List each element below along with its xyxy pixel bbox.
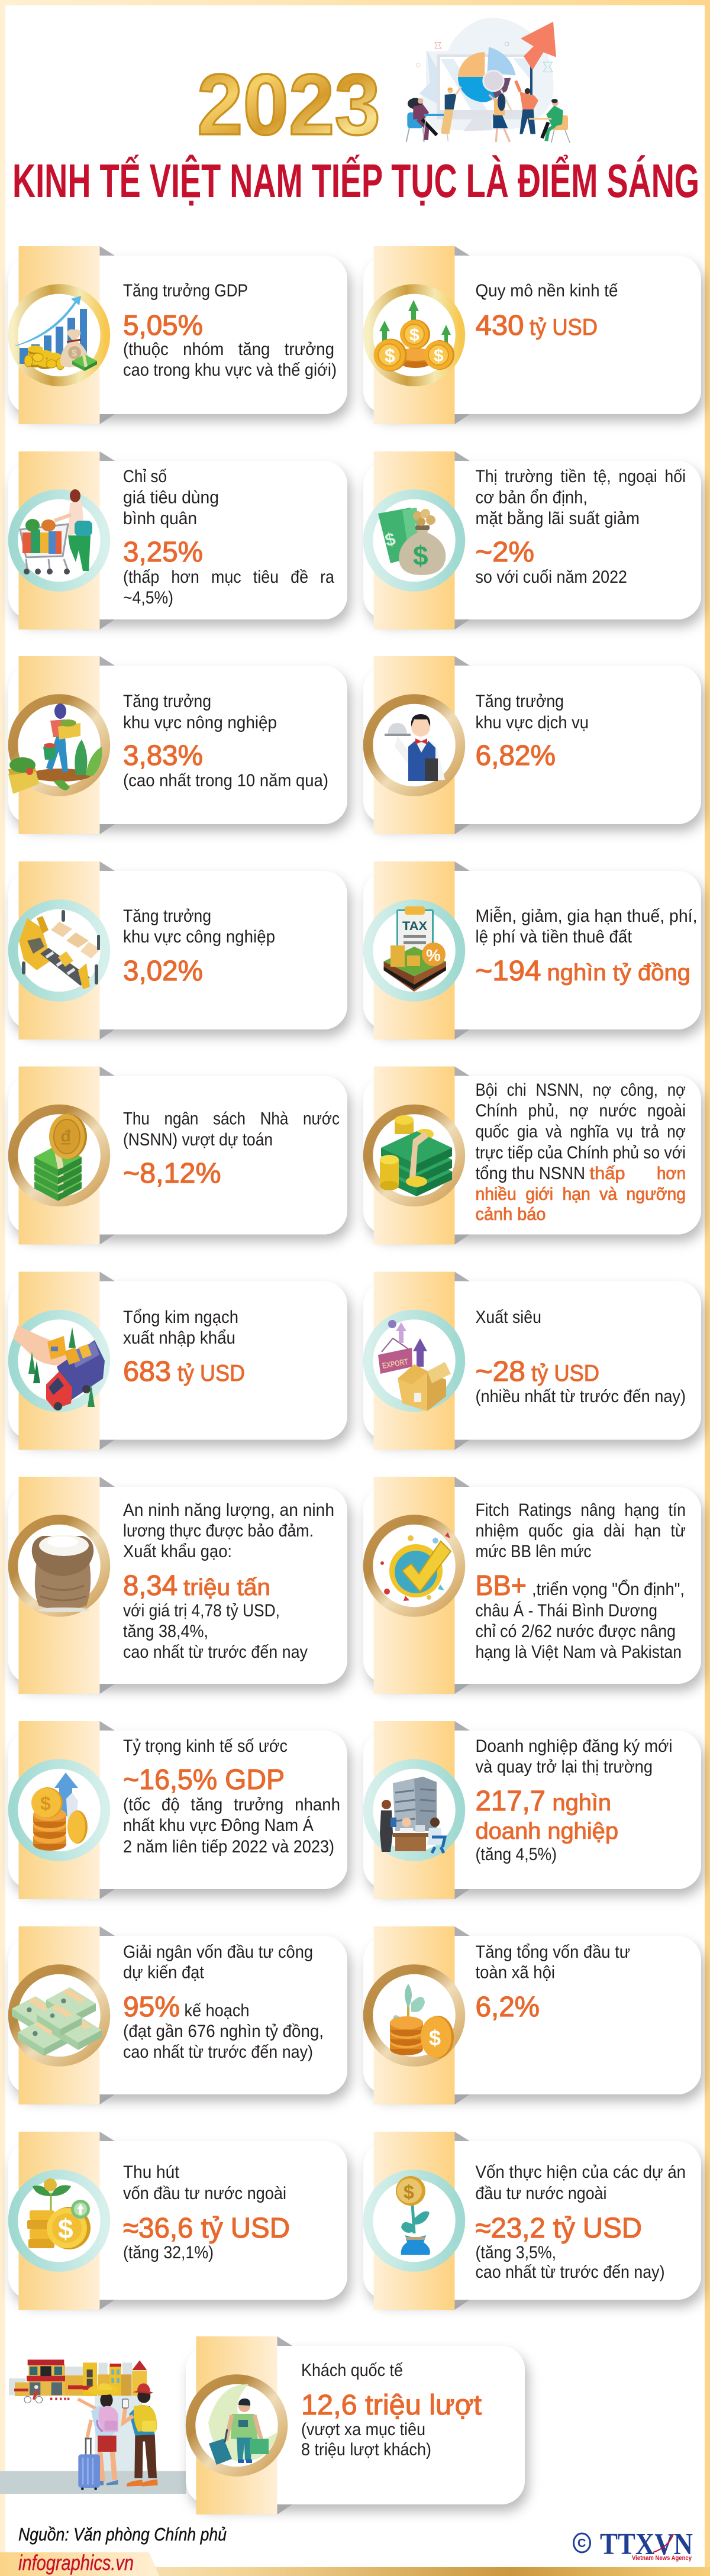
label: nhiệm quốc gia dài hạn từ <box>476 1521 686 1541</box>
icon: coins with rising arrow: $ <box>40 1793 51 1814</box>
note: châu Á - Thái Bình Dương <box>476 1601 657 1621</box>
card frame <box>8 2132 347 2310</box>
logo: TTXVN Vietnam News Agency: TTXVN <box>600 2527 693 2561</box>
label: toàn xã hội <box>476 1963 555 1982</box>
label: Tăng trưởng GDP <box>123 281 248 301</box>
note: (tăng 32,1%) <box>123 2243 214 2262</box>
label <box>476 692 589 732</box>
note: với giá trị 4,78 tỷ USD, <box>123 1601 280 1621</box>
logo: TTXVN Vietnam News Agency: Vietnam News Agency <box>632 2555 692 2562</box>
panel: tax relief <box>363 861 701 1040</box>
card frame <box>186 2336 525 2514</box>
value: 5,05% <box>123 310 203 341</box>
label <box>123 1308 238 1348</box>
icon: farmer with vegetables <box>8 703 102 794</box>
value <box>123 1991 250 2023</box>
note: (vượt xa mục tiêu <box>301 2420 425 2439</box>
icon ring <box>13 1969 105 2061</box>
label <box>123 1942 313 1982</box>
label: mức BB lên mức <box>476 1542 592 1561</box>
icon: hand, parcel and truck <box>13 1325 105 1410</box>
card frame <box>363 451 701 630</box>
panel: budget deficit and public debt <box>363 1066 701 1245</box>
label <box>476 1942 630 1982</box>
label: Tăng trưởng <box>476 692 564 711</box>
icon ring <box>13 1519 105 1612</box>
label: Thu hút <box>123 2162 180 2182</box>
label: Tổng kim ngạch <box>123 1308 238 1327</box>
label: Tăng trưởng <box>123 906 211 926</box>
value: 8,34 <box>123 1570 178 1602</box>
panel: total social investment <box>363 1926 701 2104</box>
value: ~194 <box>476 955 541 987</box>
note: cao trong khu vực và thế giới) <box>123 360 337 380</box>
label: Vốn thực hiện của các dự án <box>476 2162 686 2182</box>
icon ring <box>13 1315 105 1407</box>
value: 6,2% <box>476 1991 540 2023</box>
label <box>123 1500 334 1561</box>
card frame <box>8 1066 347 1245</box>
note: (đạt gần 676 nghìn tỷ đồng, <box>123 2022 324 2041</box>
value: 430 <box>476 310 524 341</box>
icon ring <box>368 2175 460 2267</box>
value: 12,6 triệu lượt <box>301 2390 482 2421</box>
card frame <box>363 1066 701 1245</box>
value: 6,82% <box>476 740 556 771</box>
label <box>476 906 697 947</box>
icon ring <box>368 495 460 587</box>
icon ring <box>13 904 105 996</box>
icon ring <box>13 495 105 587</box>
label: Thu ngân sách Nhà nước <box>123 1109 340 1129</box>
label: Xuất khẩu gạo: <box>123 1542 232 1561</box>
panel: public investment disbursement <box>8 1926 347 2104</box>
icon ring <box>13 699 105 792</box>
card frame <box>363 246 701 424</box>
icon: tax clipboard on land: % <box>426 946 441 964</box>
panel: agriculture growth <box>8 656 347 834</box>
label: An ninh năng lượng, an ninh <box>123 1500 334 1520</box>
icon: tax clipboard on land: TAX <box>402 919 427 933</box>
card frame <box>363 861 701 1040</box>
icon: tax clipboard on land <box>383 906 446 992</box>
label: xuất nhập khẩu <box>123 1328 235 1348</box>
label: Tỷ trọng kinh tế số ước <box>123 1736 288 1756</box>
footer band <box>0 2567 710 2576</box>
panel: monetary market <box>363 451 701 630</box>
icon: pale banknote bundles <box>12 1987 102 2056</box>
panel: international visitors <box>186 2336 525 2514</box>
icon: plant on coins: $ <box>429 2026 441 2050</box>
label: lệ phí và tiền thuê đất <box>476 927 632 947</box>
note: (thuộc nhóm tăng trưởng <box>123 340 334 359</box>
value <box>123 1356 245 1387</box>
icon ring <box>13 289 105 381</box>
label: Chỉ số <box>123 467 167 486</box>
icon: banknotes and money bag: $ <box>413 540 428 571</box>
value: ~16,5% GDP <box>123 1764 285 1796</box>
card frame <box>363 1926 701 2104</box>
note: chỉ có 2/62 nước được nâng <box>476 1622 676 1641</box>
panel: realized foreign investment <box>363 2132 701 2310</box>
label: khu vực công nghiệp <box>123 927 275 947</box>
label: Doanh nghiệp đăng ký mới <box>476 1736 672 1756</box>
value: 217,7 <box>476 1786 546 1817</box>
icon: growth bars, coins and money bag: $ <box>72 348 77 359</box>
icon ring <box>368 1969 460 2061</box>
icon: growth bars, coins and money bag <box>15 296 97 371</box>
highlighted conclusion: thấp <box>589 1164 625 1183</box>
note <box>123 1601 308 1662</box>
note: hạng là Việt Nam và Pakistan <box>476 1642 682 1662</box>
icon ring <box>368 1109 460 1202</box>
label: Quy mô nền kinh tế <box>476 281 618 301</box>
highlighted conclusion: cảnh báo <box>476 1205 546 1224</box>
note: (thấp hơn mục tiêu đề ra <box>123 567 334 587</box>
value: tỷ USD <box>531 1361 599 1386</box>
label: dự kiến đạt <box>123 1963 205 1982</box>
value: tỷ USD <box>530 315 598 340</box>
label: Giải ngân vốn đầu tư công <box>123 1942 313 1962</box>
highlighted conclusion: nhiều giới hạn và ngưỡng <box>476 1184 686 1204</box>
icon ring <box>191 2380 283 2472</box>
value: ~28 <box>476 1356 525 1387</box>
label: và quay trở lại thị trường <box>476 1757 653 1777</box>
label: vốn đầu tư nước ngoài <box>123 2184 286 2203</box>
icon: coin flower growing from a blue bag <box>396 2176 430 2255</box>
value: BB+ <box>476 1570 527 1602</box>
label: đầu tư nước ngoài <box>476 2184 607 2203</box>
note: tăng 38,4%, <box>123 1622 208 1641</box>
label <box>123 467 219 528</box>
value <box>476 1356 599 1387</box>
icon: dong coin and cash: ₫ <box>60 1126 72 1152</box>
note <box>476 1579 685 1662</box>
note <box>123 2022 324 2062</box>
icon: banknotes and money bag <box>378 508 446 575</box>
label: giá tiêu dùng <box>123 488 219 508</box>
label <box>476 1500 686 1561</box>
value: ~2% <box>476 537 534 568</box>
icon: woman pushing a shopping cart <box>20 489 92 574</box>
label <box>476 467 686 528</box>
card frame <box>8 656 347 834</box>
label <box>123 2162 286 2203</box>
label <box>123 1109 340 1150</box>
card frame <box>8 1272 347 1450</box>
value: triệu tấn <box>183 1575 270 1600</box>
card frame <box>8 1926 347 2104</box>
icon ring <box>13 1109 105 1202</box>
panel: economy size <box>363 246 701 424</box>
note: cao nhất từ trước đến nay <box>123 1642 308 1662</box>
label: mặt bằng lãi suất giảm <box>476 509 640 528</box>
note: cao nhất từ trước đến nay) <box>476 2262 665 2282</box>
value: doanh nghiệp <box>476 1819 618 1844</box>
icon: office building and business people <box>380 1777 445 1853</box>
value: nghìn tỷ đồng <box>547 960 690 986</box>
card frame <box>363 656 701 834</box>
panel: import export turnover <box>8 1272 347 1450</box>
panel: energy and food security <box>8 1477 347 1694</box>
icon ring <box>13 2175 105 2267</box>
icon: export container and box <box>378 1320 451 1411</box>
value: 3,25% <box>123 537 203 568</box>
value <box>476 310 598 341</box>
note <box>123 1795 340 1857</box>
label: khu vực nông nghiệp <box>123 713 277 732</box>
source line: Nguồn: Văn phòng Chính phủ <box>18 2524 227 2545</box>
note <box>123 340 337 380</box>
icon: coins with arrows: $ <box>385 345 395 366</box>
value <box>476 955 690 987</box>
label <box>123 692 277 732</box>
card frame <box>8 246 347 424</box>
panel: new enterprises <box>363 1721 701 1899</box>
label: tổng thu NSNN <box>476 1164 585 1183</box>
icon: dong coin and cash <box>34 1114 87 1201</box>
icon ring <box>368 1315 460 1407</box>
panel: Fitch credit rating <box>363 1477 701 1694</box>
label: Thị trường tiền tệ, ngoại hối <box>476 467 686 486</box>
note: ~4,5%) <box>123 588 173 608</box>
panel: GDP growth <box>8 246 347 424</box>
label: trực tiếp của Chính phủ so với <box>476 1143 686 1163</box>
icon: coins with rising arrow <box>31 1773 88 1851</box>
value: kế hoạch <box>185 2001 250 2020</box>
label: cơ bản ổn định, <box>476 488 588 508</box>
icon: coins with arrows: $ <box>409 325 419 345</box>
value: 683 <box>123 1356 171 1387</box>
note: 2 năm liên tiếp 2022 và 2023) <box>123 1837 334 1857</box>
card frame <box>363 1272 701 1450</box>
label <box>476 2162 686 2203</box>
icon: waiter with cloche <box>385 714 445 781</box>
note: (tăng 4,5%) <box>476 1845 557 1864</box>
value: nghìn <box>553 1790 611 1816</box>
panel: services growth <box>363 656 701 834</box>
label: Tăng tổng vốn đầu tư <box>476 1942 630 1962</box>
note: nhất khu vực Đông Nam Á <box>123 1816 314 1835</box>
note <box>301 2420 431 2459</box>
note <box>476 2243 665 2282</box>
card frame <box>8 1477 347 1694</box>
label: Fitch Ratings nâng hạng tín <box>476 1500 686 1520</box>
label <box>123 906 275 947</box>
icon: gold coins with sprout: $ <box>58 2213 73 2244</box>
value: ≈36,6 tỷ USD <box>123 2213 290 2244</box>
panel: consumer price index <box>8 451 347 630</box>
label: Khách quốc tế <box>301 2361 403 2380</box>
icon: gold coins with sprout <box>27 2178 91 2249</box>
panel: digital economy share <box>8 1721 347 1899</box>
value: ~8,12% <box>123 1158 221 1189</box>
card frame <box>8 451 347 630</box>
note <box>123 567 334 608</box>
value: 95% <box>123 1991 180 2023</box>
card frame <box>363 1477 701 1694</box>
note: (cao nhất trong 10 năm qua) <box>123 771 328 790</box>
label: bình quân <box>123 509 197 528</box>
icon: coins with arrows: $ <box>434 346 444 366</box>
icon: banknotes and money bag: $ <box>383 529 398 551</box>
note: (tốc độ tăng trưởng nhanh <box>123 1795 340 1815</box>
icon: cash stacks and gold coins <box>380 1115 452 1196</box>
icon: coin flower growing from a blue bag: $ <box>404 2181 414 2203</box>
panel: state budget revenue <box>8 1066 347 1245</box>
label: Xuất siêu <box>476 1308 541 1327</box>
icon ring <box>368 1764 460 1857</box>
label: quốc gia và nghĩa vụ trả nợ <box>476 1122 686 1142</box>
panel: industry growth <box>8 861 347 1040</box>
label: (NSNN) vượt dự toán <box>123 1130 273 1150</box>
card frame <box>363 1721 701 1899</box>
icon: rating check mark <box>380 1532 451 1601</box>
header illustration: team analysing charts <box>406 18 570 143</box>
value: ≈23,2 tỷ USD <box>476 2213 642 2244</box>
icon: rice sack <box>32 1535 93 1612</box>
icon: coins with arrows <box>374 300 454 372</box>
label <box>476 1736 672 1777</box>
value <box>123 1570 270 1602</box>
year heading 2023: 2023 <box>197 56 380 153</box>
icon ring <box>368 1519 460 1612</box>
note: ,triển vọng "Ổn định", <box>532 1579 685 1599</box>
illustration: tourists looking at the old town <box>0 2359 186 2494</box>
icon: factory conveyor line <box>19 910 101 989</box>
panel: attracted foreign investment <box>8 2132 347 2310</box>
icon ring <box>368 289 460 381</box>
logo: TTXVN Vietnam News Agency: C <box>577 2537 586 2550</box>
value <box>476 1786 618 1844</box>
icon ring <box>13 1764 105 1857</box>
label: khu vực dịch vụ <box>476 713 589 732</box>
note: cao nhất từ trước đến nay) <box>123 2042 313 2062</box>
label: lương thực được bảo đảm. <box>123 1521 314 1541</box>
panel: trade surplus <box>363 1272 701 1450</box>
label <box>476 1080 686 1183</box>
icon: plant on coins <box>390 1984 454 2058</box>
note: 8 triệu lượt khách) <box>301 2440 431 2459</box>
card frame <box>363 2132 701 2310</box>
logo: TTXVN Vietnam News Agency <box>574 2527 693 2562</box>
value: tỷ USD <box>178 1361 245 1386</box>
footer tab: infographics.vn: infographics.vn <box>18 2551 134 2575</box>
label: Miễn, giảm, gia hạn thuế, phí, <box>476 906 697 926</box>
label: Tăng trưởng <box>123 692 211 711</box>
highlighted conclusion <box>476 1164 686 1224</box>
note: so với cuối năm 2022 <box>476 567 627 587</box>
icon: traveller with luggage <box>208 2384 278 2465</box>
icon ring <box>368 904 460 996</box>
icon: export container and box: EXPORT <box>382 1357 409 1370</box>
value: 3,83% <box>123 740 203 771</box>
highlighted conclusion: hơn <box>657 1164 686 1183</box>
note: (tăng 3,5%, <box>476 2243 556 2262</box>
label: Chính phủ, nợ nước ngoài <box>476 1101 686 1121</box>
value: 3,02% <box>123 955 203 987</box>
icon ring <box>368 699 460 792</box>
note: (nhiều nhất từ trước đến nay) <box>476 1387 686 1406</box>
card frame <box>8 861 347 1040</box>
card frame <box>8 1721 347 1899</box>
